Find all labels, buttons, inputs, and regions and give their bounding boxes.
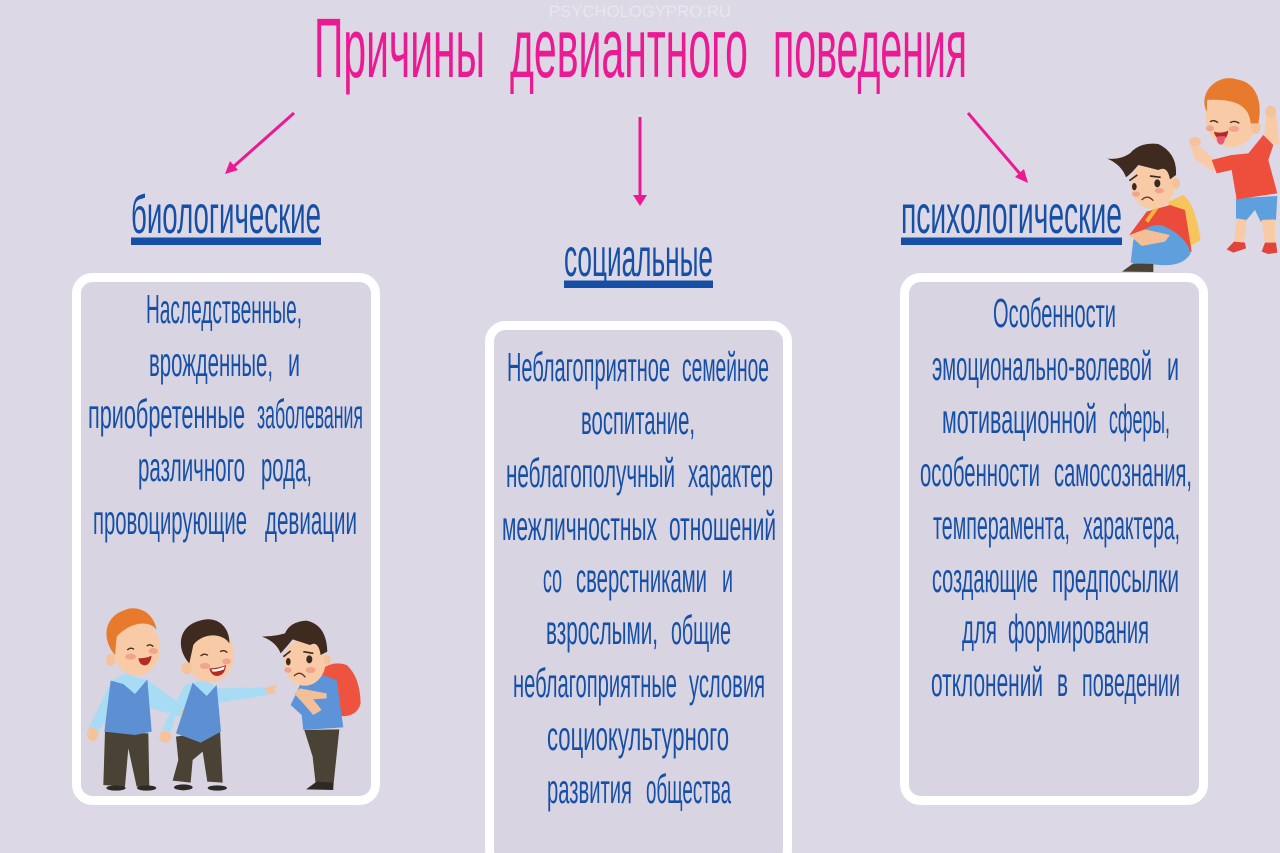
panel: social: [490, 326, 788, 853]
illustration: sad boy and teasing boy: [1107, 78, 1279, 272]
text: biological causes: [88, 286, 363, 543]
text: social causes: межличностных: [502, 503, 657, 549]
text: social causes: социокультурного: [547, 713, 729, 759]
text: social causes: условия: [689, 660, 765, 706]
text: social causes: Неблагоприятное: [507, 344, 670, 390]
text: psychological causes: мотивационной: [942, 396, 1097, 442]
text: social causes: неблагополучный: [506, 450, 675, 496]
watermark: PSYCHOLOGYPRO.RU: [549, 2, 731, 21]
text: social causes: взрослыми,: [546, 607, 658, 653]
text: поведения: [773, 1, 967, 95]
text: social causes: [502, 344, 776, 812]
boy 1: [87, 608, 193, 791]
text: заболевания: [257, 391, 363, 437]
text: biological causes: провоцирующие: [93, 497, 247, 543]
text: psychological causes: Особенности: [993, 290, 1116, 336]
text: social causes: воспитание,: [581, 397, 695, 443]
heading: biological: биологические: [131, 185, 321, 245]
text: social causes: общие: [671, 607, 731, 653]
text: psychological causes: [920, 290, 1192, 705]
text: psychological causes: и: [1167, 343, 1179, 389]
title: девиантного: [510, 1, 748, 95]
text: psychological causes: в: [1057, 659, 1068, 705]
text: biological causes: рода,: [261, 444, 312, 490]
title: [314, 1, 967, 95]
ginger boy with tongue out: [1189, 78, 1279, 254]
text: psychological causes: отклонений: [931, 659, 1043, 705]
text: psychological causes: поведении: [1082, 659, 1180, 705]
arrow: to psychological: [968, 113, 1028, 183]
text: biological causes: приобретенные: [88, 391, 245, 437]
text: social causes: развития: [547, 766, 632, 812]
heading: biological: [131, 185, 321, 245]
text: psychological causes: создающие: [932, 555, 1038, 601]
text: psychological causes: сферы,: [1109, 396, 1170, 442]
text: social causes: и: [722, 555, 733, 601]
text: psychological causes: для: [962, 606, 997, 652]
text: social causes: отношений: [669, 503, 776, 549]
text: biological causes: врожденные,: [149, 339, 273, 385]
arrow: to biological: [225, 113, 294, 174]
illustration: boys laughing at a sad boy: [87, 608, 361, 791]
heading: psychological: [901, 185, 1122, 245]
title: Причины: [314, 1, 485, 95]
text: biological causes: Наследственные,: [146, 286, 302, 332]
text: социальные: [564, 228, 713, 288]
boy 3: [262, 621, 361, 790]
text: biological causes: различного: [138, 444, 245, 490]
arrow: to social: [633, 117, 647, 206]
text: social causes: неблагоприятные: [513, 660, 677, 706]
text: social causes: характер: [688, 450, 773, 496]
text: social causes: семейное: [682, 344, 769, 390]
text: social causes: общества: [646, 766, 731, 812]
sad boy with yellow backpack: [1107, 144, 1201, 272]
text: psychological causes: темперамента,: [933, 502, 1070, 548]
panel: psychological: [904, 278, 1204, 800]
boy 2: [159, 619, 278, 791]
text: biological causes: девиации: [265, 497, 357, 543]
text: social causes: со: [543, 555, 562, 601]
text: biological causes: и: [288, 339, 300, 385]
text: psychological causes: особенности: [920, 449, 1040, 495]
panel: biological: [76, 278, 376, 800]
heading: social: [564, 228, 713, 288]
text: social causes: сверстниками: [576, 555, 707, 601]
